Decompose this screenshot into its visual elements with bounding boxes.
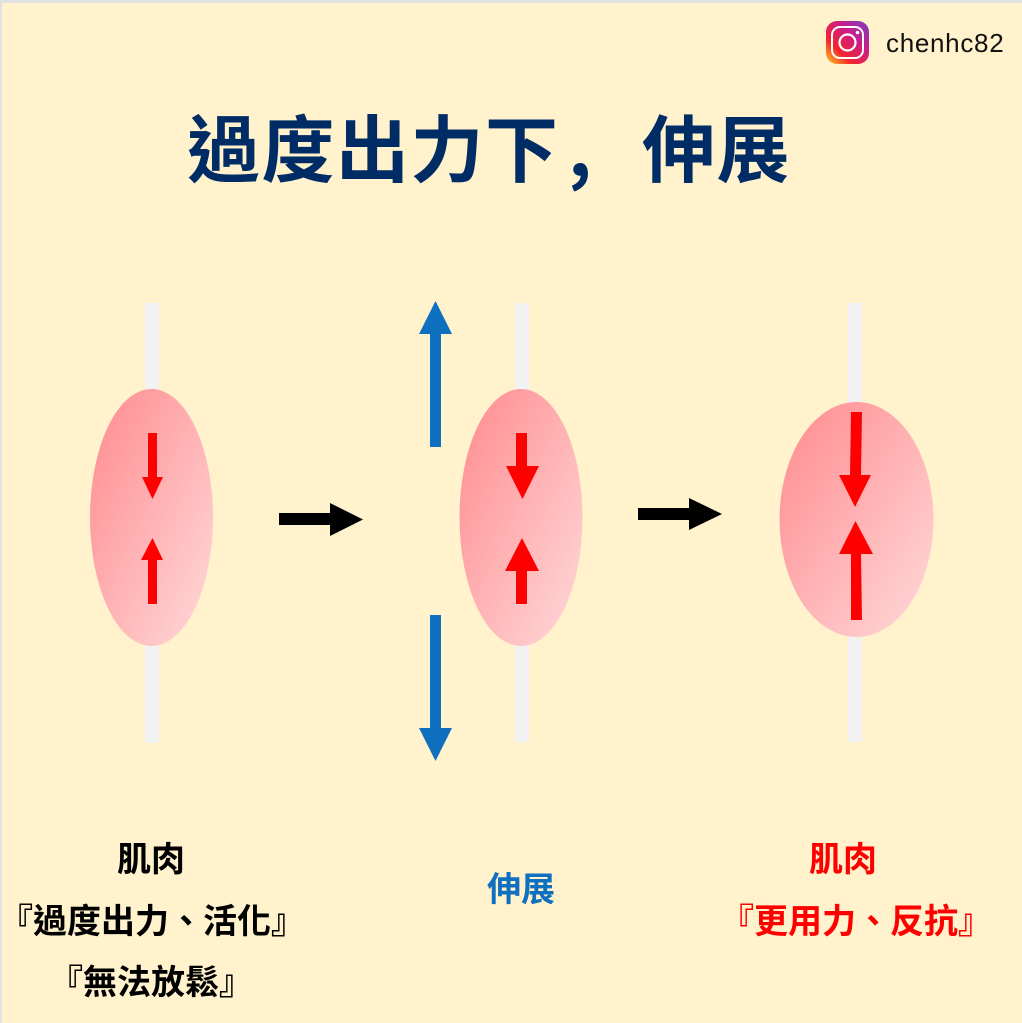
arrow: black right 2 <box>638 498 722 530</box>
icon: instagram logo <box>826 21 869 64</box>
title: 過度出力下 <box>187 111 560 192</box>
label: right muscle state <box>720 841 992 941</box>
muscle diagram: right <box>780 303 934 742</box>
title: , <box>568 92 592 198</box>
arrow: blue stretch down <box>419 615 452 761</box>
label: left muscle state <box>0 841 305 1002</box>
muscle diagram: middle <box>460 303 582 742</box>
instagram handle: chenhc82 <box>886 28 1004 58</box>
label: left muscle state: 『無法放鬆』 <box>49 964 253 1002</box>
label: left muscle state: 『過度出力、活化』 <box>0 903 305 941</box>
muscle diagram: left <box>90 303 213 743</box>
arrow: black right 1 <box>279 503 363 536</box>
label: right muscle state: 『更用力、反抗』 <box>720 903 992 941</box>
label: right muscle state: 肌肉 <box>809 841 877 879</box>
label: left muscle state: 肌肉 <box>117 841 185 879</box>
arrow: blue stretch up <box>419 301 452 447</box>
title: 伸展 <box>642 111 791 192</box>
label: stretch: 伸展 <box>487 871 555 909</box>
